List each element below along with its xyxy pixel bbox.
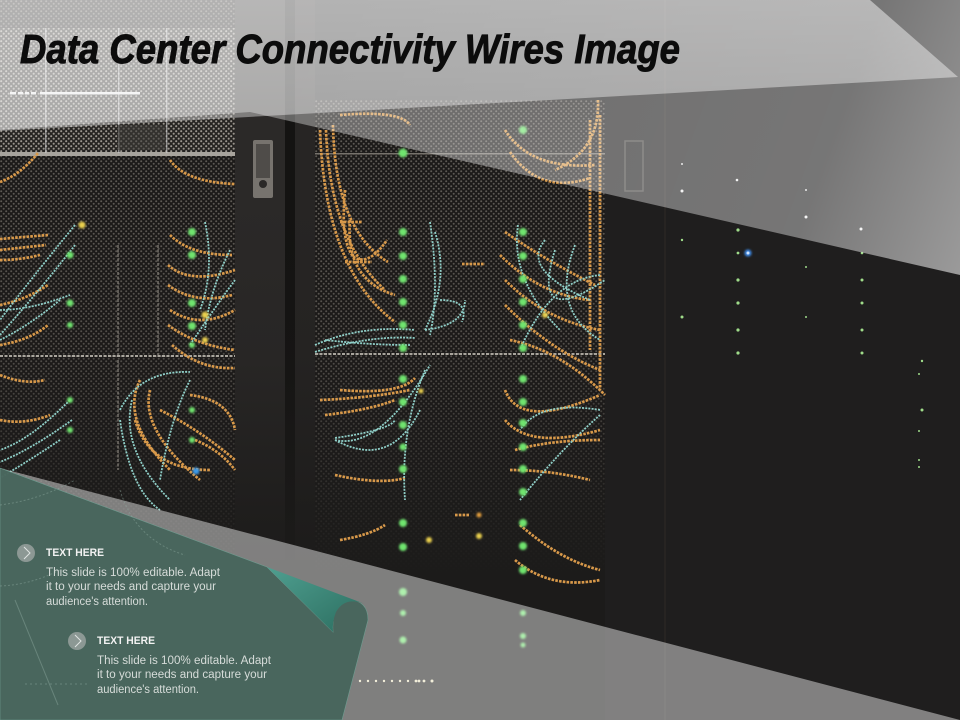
note body: it to your needs and capture your [97, 669, 267, 681]
left rack mesh [0, 0, 235, 560]
icon: arrow circle [68, 632, 86, 650]
centre rack mesh [315, 100, 605, 660]
rack fade [0, 200, 605, 720]
top server shelves [0, 28, 605, 156]
title underline [10, 92, 140, 94]
note body [97, 655, 272, 696]
note heading: TEXT HERE [46, 547, 104, 559]
translucent grey band along the bottom [0, 468, 960, 720]
light title banner [0, 0, 958, 131]
right rack indicator dots [680, 163, 924, 468]
right rack [605, 0, 960, 720]
translucent grey band across the top [0, 0, 960, 275]
folded corner [267, 567, 365, 632]
note 1 [17, 544, 221, 608]
bottom-band indicator dots [359, 680, 434, 682]
note body [46, 567, 221, 608]
note body: audience's attention. [46, 596, 148, 608]
faint photo wires through panel [0, 480, 185, 705]
note body: This slide is 100% editable. Adapt [46, 567, 221, 579]
note body: it to your needs and capture your [46, 581, 216, 593]
door pillar with handle [235, 0, 315, 560]
note body: audience's attention. [97, 684, 199, 696]
amber and blue LEDs [78, 222, 752, 543]
note body: This slide is 100% editable. Adapt [97, 655, 272, 667]
note 2 [68, 632, 272, 696]
title: Data Center Connectivity Wires Image [20, 26, 680, 72]
note heading: TEXT HERE [97, 635, 155, 647]
orange cables [0, 100, 605, 582]
teal cables [0, 222, 605, 510]
icon: arrow circle [17, 544, 35, 562]
shelf lines [0, 245, 605, 470]
status LEDs [66, 126, 527, 648]
teal note panel with folded corner [0, 468, 368, 720]
panel body [0, 468, 368, 720]
